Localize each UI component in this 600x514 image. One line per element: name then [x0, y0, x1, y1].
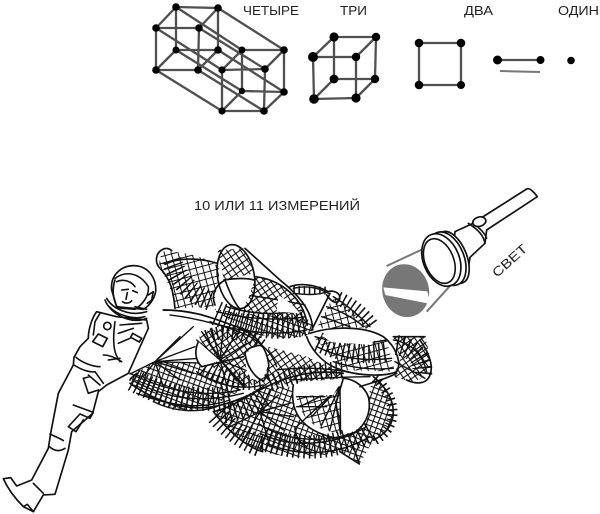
mesh hole: centre ellipse: [246, 345, 268, 380]
mesh hole: lower wedge: [297, 380, 342, 396]
label: four: ЧЕТЫРЕ: [243, 3, 299, 18]
mesh hole: lower circle: [343, 380, 369, 434]
heading: 10 or 11 dimensions: 10 ИЛИ 11 ИЗМЕРЕНИЙ: [194, 198, 360, 213]
astronaut body: [3, 312, 148, 512]
label: light: СВЕТ: [489, 241, 530, 280]
illustration: astronaut: [3, 266, 156, 512]
illustration: tangled mesh of extra dimensions: [130, 242, 431, 464]
diagram: three-dimensional cube: [308, 32, 380, 104]
astronaut details: [23, 274, 153, 512]
light spot: [376, 245, 458, 322]
label: one: ОДИН: [558, 3, 599, 18]
mesh hole: right loop: [322, 331, 378, 345]
astronaut badge: circle: [104, 322, 111, 330]
mesh hole: upper tube: [225, 279, 252, 307]
label: two: ДВА: [464, 3, 493, 18]
mesh hole: left: [196, 342, 219, 367]
diagram: one-dimensional line: [493, 56, 544, 72]
flashlight head rings: [414, 223, 487, 292]
flashlight button: [472, 215, 487, 228]
mesh outlines: [156, 248, 313, 330]
astronaut patch: arm: [131, 333, 142, 342]
tube opening: [212, 242, 260, 312]
diagram: four-dimensional tesseract: [152, 3, 288, 115]
label: three: ТРИ: [340, 3, 367, 18]
astronaut patch: chest: [93, 334, 107, 347]
astronaut helmet: [112, 266, 156, 309]
illustration: flashlight and light beam: [376, 189, 537, 322]
flashlight body: [450, 189, 537, 285]
mesh hole: upper wedge: [277, 295, 300, 313]
diagram: single point: [567, 57, 575, 64]
diagram: two-dimensional square: [415, 39, 465, 89]
